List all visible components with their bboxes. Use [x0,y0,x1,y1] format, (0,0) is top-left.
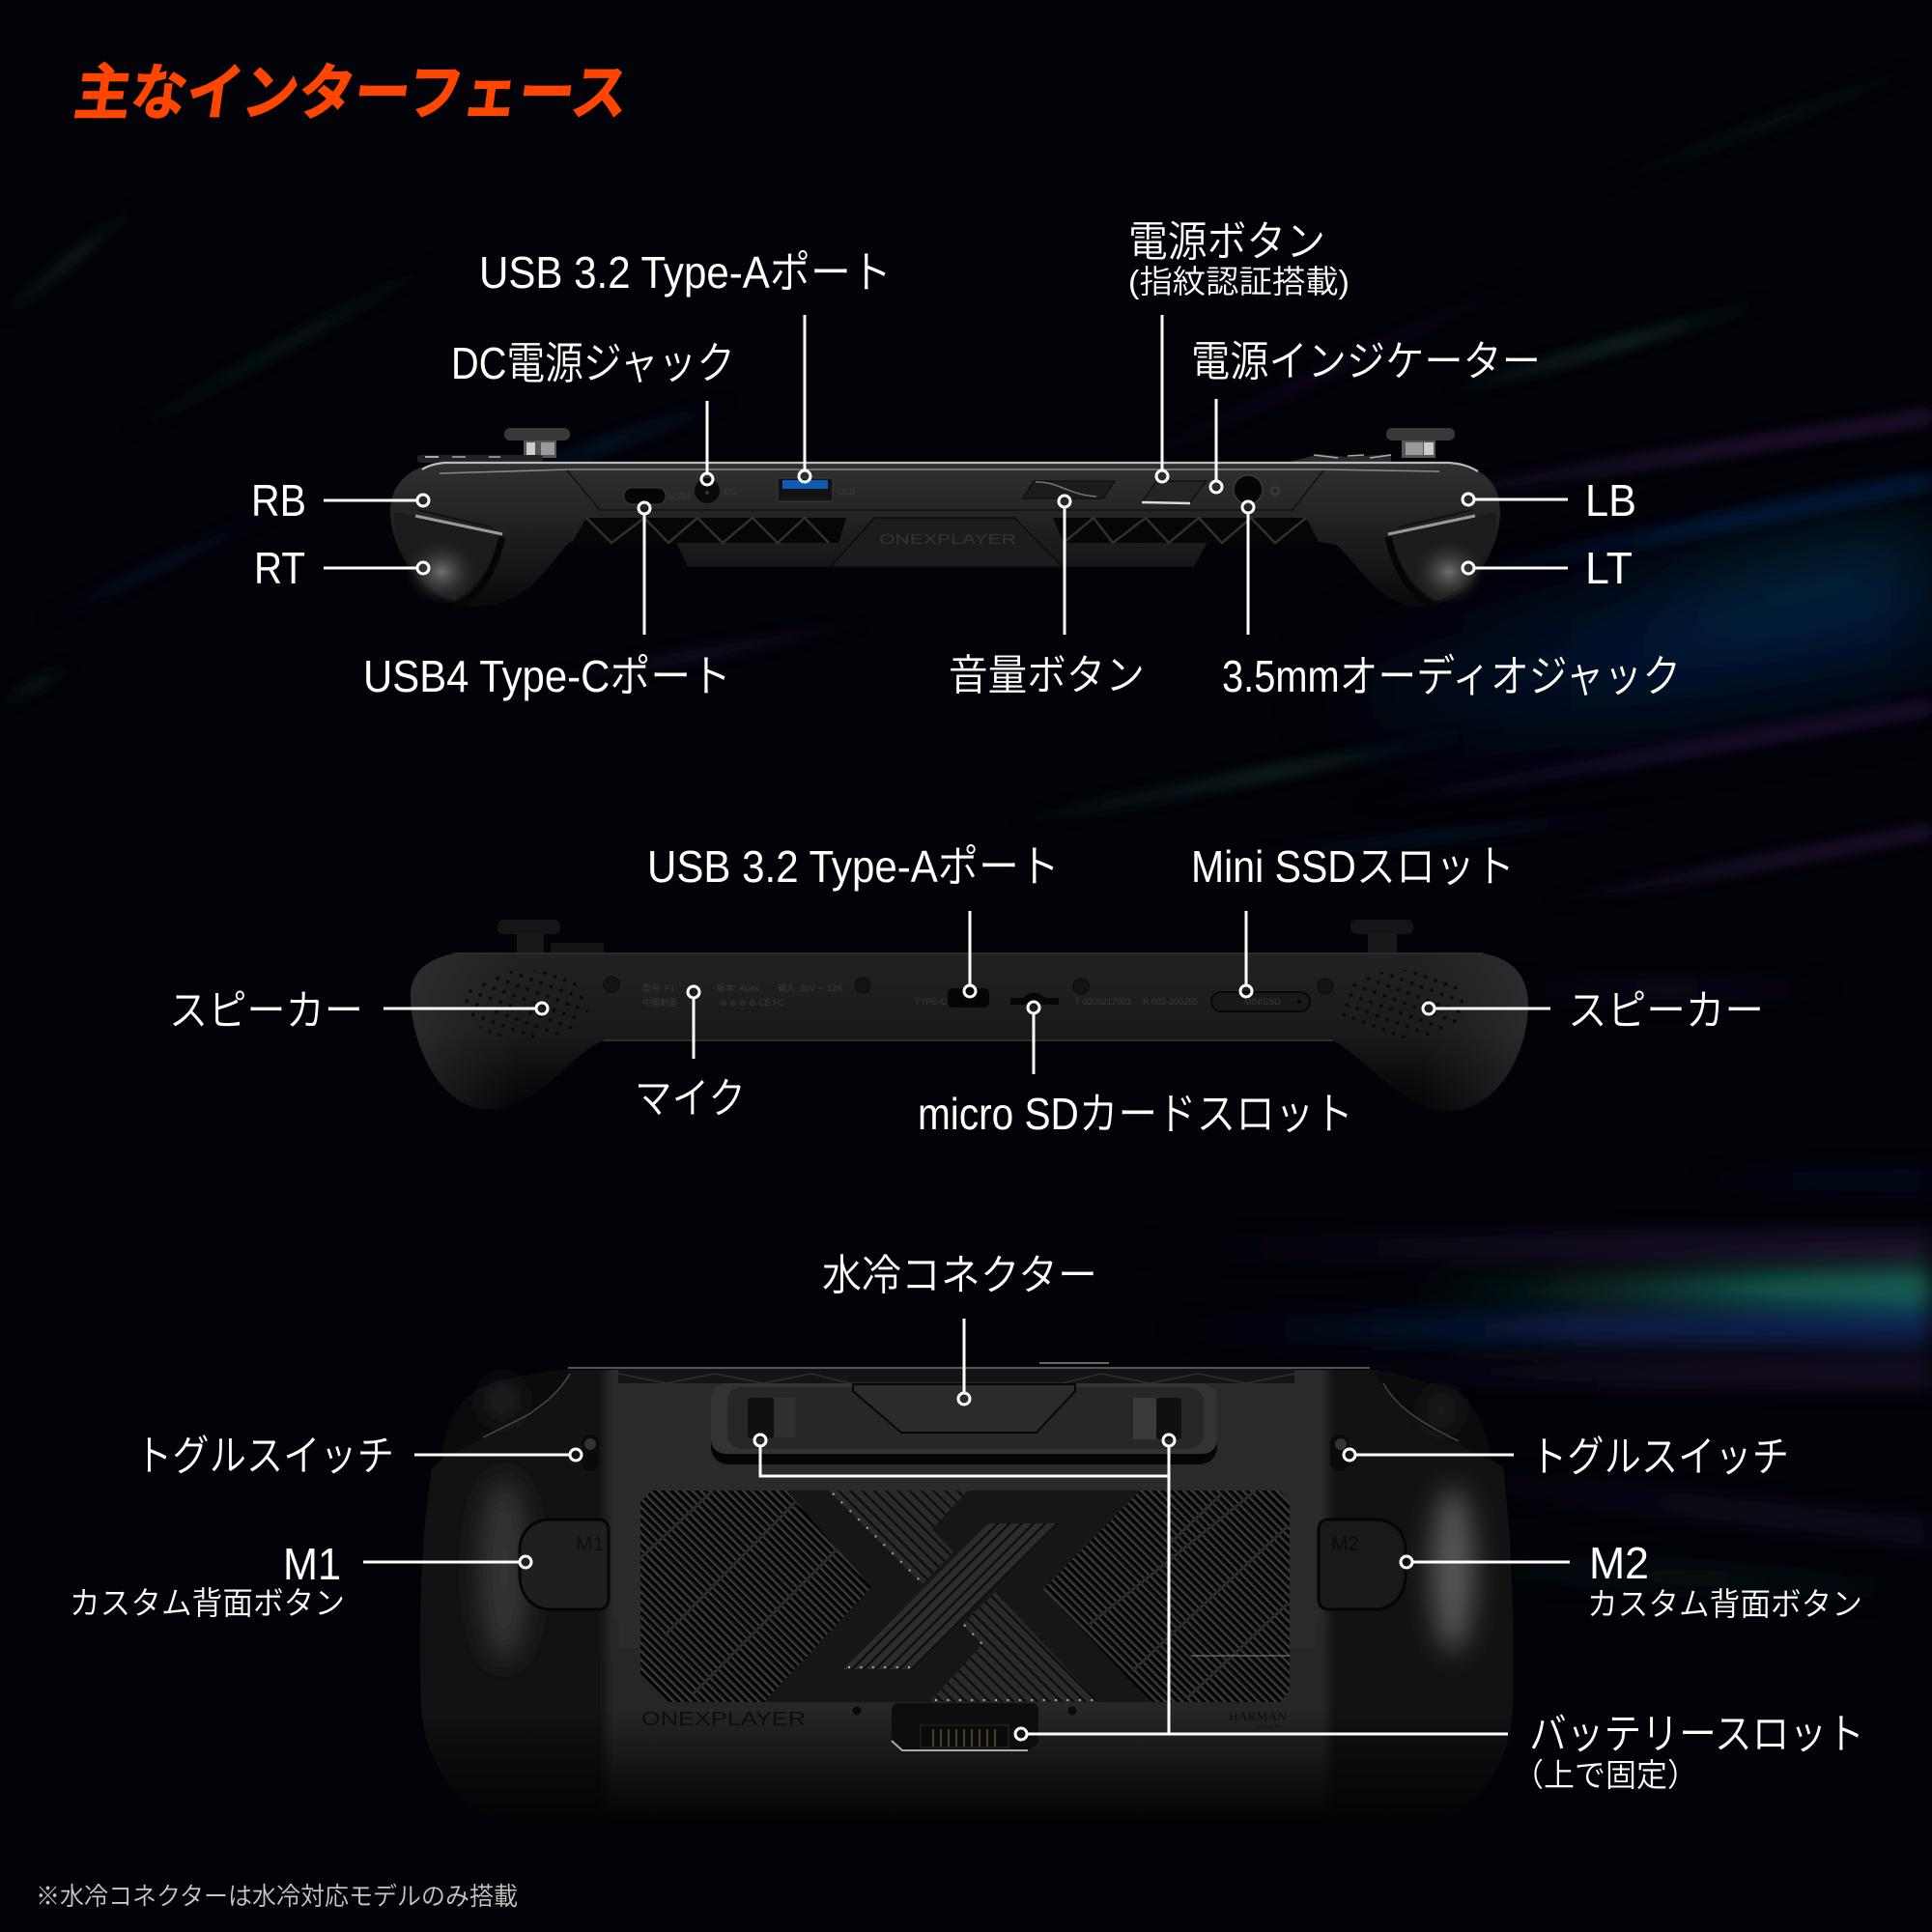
callouts: back view [70,1252,1864,1793]
footnote: ※水冷コネクターは水冷対応モデルのみ搭載 [36,1882,518,1911]
top highlights [422,463,1478,510]
callout: USB4 Type-C: USB4 Type-Cポート [363,651,731,701]
screws [604,977,1333,994]
callout: left speaker [169,987,548,1035]
callout: M2: カスタム背面ボタン [1587,1586,1862,1622]
callout: volume: 音量ボタン [949,652,1145,699]
callout: LT: LT [1585,543,1633,593]
button M2 [1319,1520,1406,1609]
port: USB4 Type-C [624,488,692,504]
callout: M1: M1 [283,1539,341,1589]
side sheen [411,953,1528,1111]
callout: DC jack: DC電源ジャック [451,338,735,388]
callout: Mini SSD [1191,841,1515,997]
button M1 [520,1520,609,1609]
body edge line [454,953,1483,1040]
regulatory print: 输入: 20V ⎓ 12A [778,982,842,993]
port: micro SD [1010,993,1059,1005]
callout: LT [1463,543,1633,593]
callout: power indicator: 電源インジケーター [1191,338,1541,385]
body [411,953,1528,1111]
regulatory print: ⊛ ⊚ ⊛ ⊚ CE FC [720,998,785,1008]
regulatory print: 中国制造 [642,997,677,1008]
port: DC jack [695,478,737,503]
callout: DC jack [451,338,735,485]
background streaks: upper right [1014,58,1932,908]
callout: battery slot with latches [754,1435,1864,1793]
bottom fade [440,1736,1495,1821]
callout: USB Type-A [647,841,1060,997]
volume button [1023,481,1115,498]
right trigger [1388,510,1496,607]
regulatory print: 型号: F1 [642,983,675,993]
regulatory print: 版本: Apex [717,982,759,993]
left trigger [394,510,502,607]
callout: M1 [70,1539,531,1621]
logo harman: AudioEFX [1256,1725,1282,1731]
callout: RT: RT [254,543,305,593]
speaker grille left [638,1488,874,1705]
screw holes [852,1706,1076,1716]
battery slot [892,1703,1038,1750]
callout: right speaker [1423,987,1764,1035]
callout: USB4 Type-C [363,502,731,701]
callout: micro SD [918,1002,1353,1139]
callout: LB [1463,475,1636,526]
callout: power button: 電源ボタン [1128,218,1325,266]
callout: USB 3.2 Type-A: USB 3.2 Type-Aポート [479,247,892,298]
toggle left [582,1435,599,1471]
left stick [497,920,604,952]
callout: toggle right [1344,1434,1789,1481]
regulatory print [642,982,1198,1008]
callouts: top view [251,218,1681,701]
body [390,464,1500,607]
callout: Mini SSD: Mini SSDスロット [1191,841,1515,892]
water cooling connector cover [853,1384,1075,1433]
power button [1142,481,1207,503]
callout: audio jack: 3.5mmオーディオジャック [1222,651,1681,701]
handle recess [711,1383,1217,1464]
top edge and teeth [568,1362,1370,1383]
left thumbstick [417,428,570,463]
device: bottom edge view [411,920,1528,1111]
X panel [764,1491,1151,1702]
background glow: blue right [1304,526,1932,744]
callout: water connector: 水冷コネクター [822,1252,1097,1299]
right stick [1350,920,1413,952]
audio jack [1234,475,1279,504]
callouts: bottom view [169,841,1764,1139]
callout: power button: (指紋認証搭載) [1128,264,1350,299]
title: 主なインターフェース [70,44,635,132]
callout: LB: LB [1585,475,1636,526]
callout: power indicator [1191,338,1541,493]
device: back view [406,1352,1526,1835]
centre plate with logo: ONEXPLAYER [879,531,1016,548]
callout: battery slot with latches: （上で固定） [1513,1757,1698,1793]
callout: toggle right: トグルスイッチ [1530,1434,1789,1481]
callout: toggle left: トグルスイッチ [135,1433,394,1480]
button M2: M2 [1331,1533,1359,1555]
port: USB Type-A [778,478,856,501]
callout: M2 [1401,1538,1862,1622]
callout: M2: M2 [1589,1538,1649,1588]
callout: RT [254,543,429,593]
right thumbstick [1290,428,1455,463]
logo onexplayer: ONEXPLAYER [641,1709,806,1730]
callout: microphone [635,986,746,1122]
right latch [1133,1398,1181,1439]
logo harman: HARMAN [1229,1709,1288,1723]
callout: power button [1128,218,1350,482]
callout: micro SD: micro SDカードスロット [918,1089,1353,1139]
centre panel [605,1370,1329,1777]
left latch [748,1398,795,1438]
callout: toggle left [135,1433,582,1480]
port: USB4 Type-C: USB4 [668,492,692,501]
toggle right [1330,1435,1349,1471]
logo harman [1229,1709,1288,1731]
port: Type-A under cover [948,988,989,1008]
callout: USB Type-A: USB 3.2 Type-Aポート [647,841,1060,892]
right shoulder trigger [1373,1372,1502,1466]
left shoulder trigger [442,1371,570,1459]
vents [572,518,1320,543]
button M1: M1 [576,1533,604,1555]
callout: battery slot with latches: バッテリースロット [1529,1711,1864,1758]
callout: volume [949,496,1145,699]
device: top edge view [390,428,1500,607]
callout: microphone: マイク [635,1075,746,1122]
background streaks: lower right [1111,983,1932,1596]
port: USB Type-A: USB [838,487,856,497]
callout: M1: カスタム背面ボタン [70,1585,345,1621]
port: Mini SSD: MINISSD [1244,997,1281,1007]
port: DC jack: DC [724,487,737,497]
regulatory print: T 0200217003 [1075,997,1131,1007]
grip highlights [479,1478,1474,1662]
speaker grille right [1041,1488,1293,1705]
callout: RB: RB [251,475,306,526]
port: Mini SSD [1211,992,1310,1011]
callout: water connector [822,1252,1097,1405]
callout: USB 3.2 Type-A [479,247,892,482]
callout: RB [251,475,429,526]
regulatory print: TYPE-C [915,997,948,1007]
callout: audio jack [1222,501,1681,701]
speakers [464,970,1465,1039]
centre plate with logo [831,518,1063,567]
body [420,1370,1514,1821]
regulatory print: R 003-200255 [1143,997,1198,1007]
callout: right speaker: スピーカー [1568,987,1764,1035]
background streaks: upper left [0,199,869,711]
callout: left speaker: スピーカー [169,987,363,1035]
